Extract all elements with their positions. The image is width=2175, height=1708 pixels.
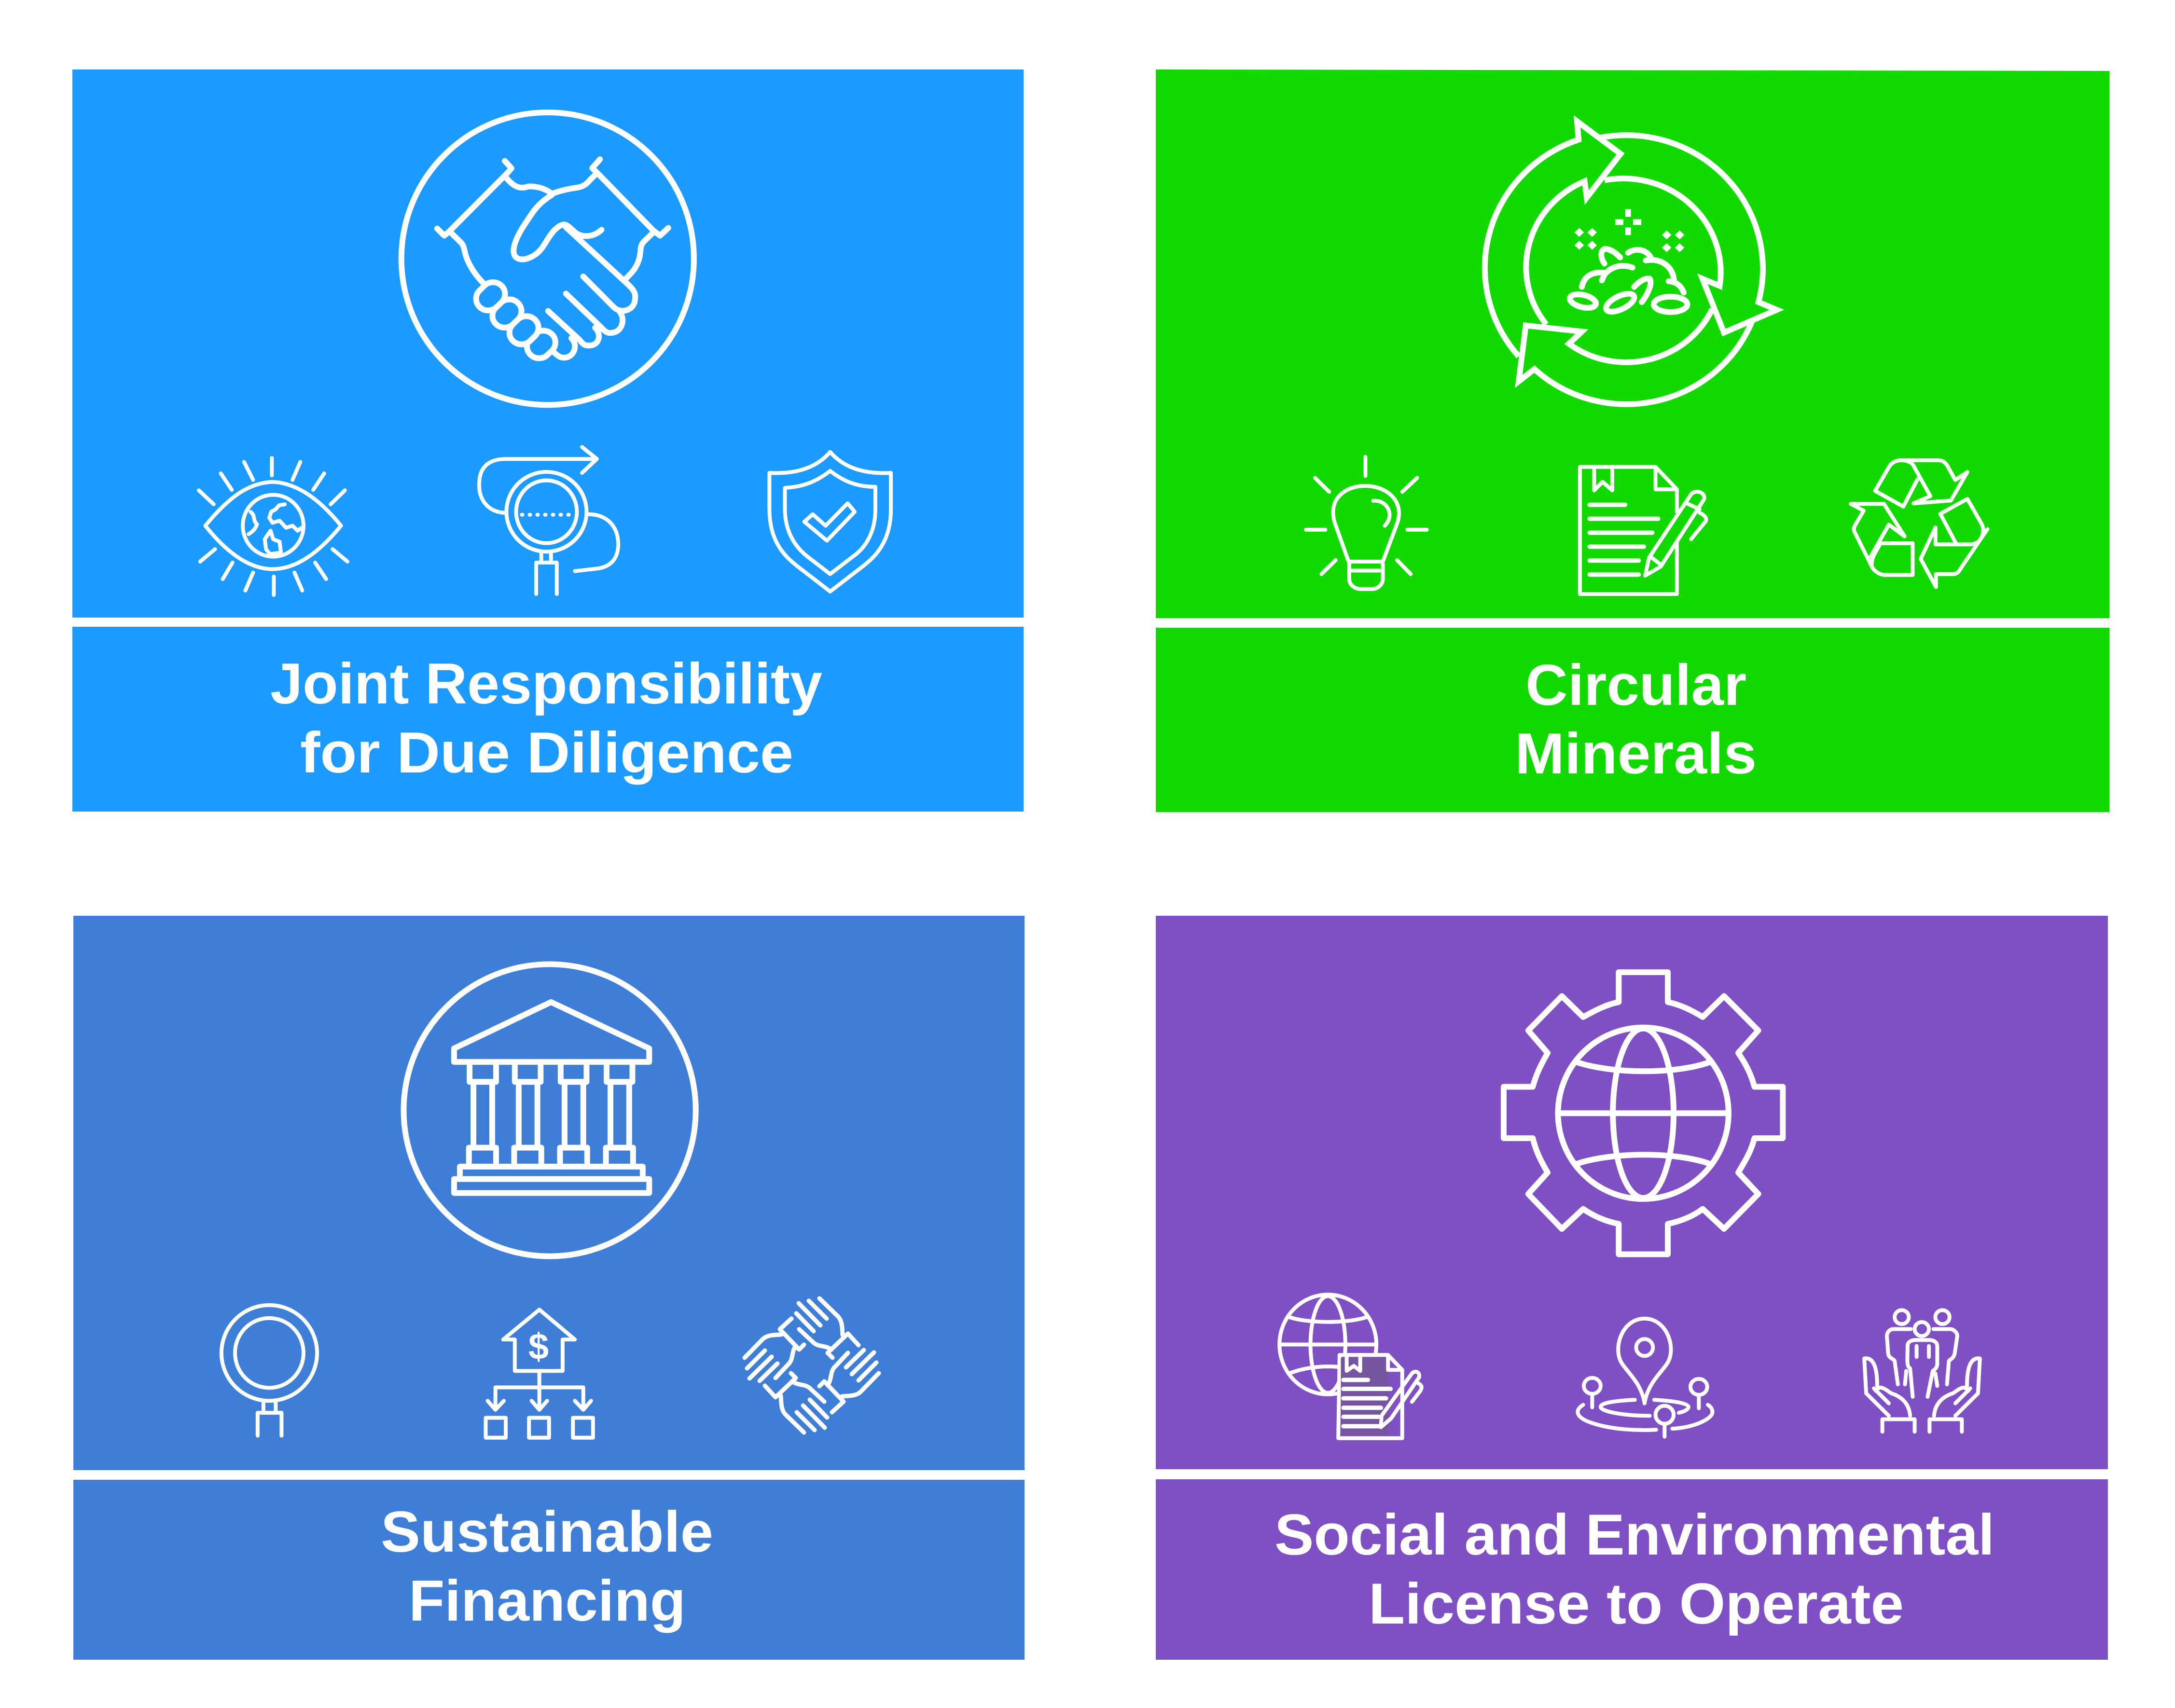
icon: handshake in circle <box>402 112 694 405</box>
icon: house with dollar and allocation tree: $ <box>528 1326 549 1367</box>
icon: circular arrows around minerals <box>1485 122 1777 404</box>
icon: people held in hands <box>1864 1310 1980 1432</box>
panel: Joint Responsibility for Due Diligence <box>72 69 1024 812</box>
heading: Circular Minerals: Minerals <box>1515 721 1757 786</box>
icon: location pins <box>1578 1319 1712 1437</box>
heading: Circular Minerals <box>1515 653 1757 786</box>
caption band: purple <box>1156 1479 2108 1660</box>
panel: Social and Environmental License to Operate <box>1156 916 2108 1660</box>
panel background: green icon area <box>1156 69 2109 618</box>
panel background: steel blue icon area <box>73 916 1025 1470</box>
heading: Social and Environmental License to Operate: Social and Environmental <box>1275 1502 1995 1567</box>
heading: Circular Minerals: Circular <box>1525 653 1746 717</box>
heading: Social and Environmental License to Operate: License to Operate <box>1369 1571 1904 1636</box>
heading: Joint Responsibility for Due Diligence: for Due Diligence <box>300 720 793 785</box>
icon: gear with globe <box>1504 972 1783 1254</box>
icon: recycling arrows <box>1851 460 1987 587</box>
caption band: steel blue <box>73 1480 1025 1660</box>
icon: shield with check <box>769 452 891 592</box>
icon: four linked hands <box>745 1298 879 1433</box>
caption band: blue <box>72 627 1024 812</box>
caption band: green <box>1156 628 2109 812</box>
panel background: blue icon area <box>72 69 1024 618</box>
panel background: purple icon area <box>1156 916 2108 1469</box>
heading: Sustainable Financing: Sustainable <box>381 1500 713 1564</box>
heading: Sustainable Financing <box>381 1500 713 1633</box>
icon: magnifier with process arrow <box>479 447 618 594</box>
icon: eye with globe <box>199 458 347 595</box>
heading: Joint Responsibility for Due Diligence: Joint Responsibility <box>270 651 822 716</box>
icon: magnifying glass <box>222 1305 317 1436</box>
panel: Sustainable Financing <box>73 916 1025 1660</box>
heading: Social and Environmental License to Operate <box>1275 1502 1995 1636</box>
icon: light bulb <box>1306 457 1427 589</box>
heading: Joint Responsibility for Due Diligence <box>270 651 822 785</box>
panel: Circular Minerals <box>1156 69 2109 812</box>
icon: bank building in circle <box>403 964 696 1256</box>
icon: document with pencil <box>1580 467 1706 594</box>
icon: house with dollar and allocation tree <box>486 1309 593 1438</box>
heading: Sustainable Financing: Financing <box>409 1569 686 1633</box>
icon: globe with document <box>1279 1295 1422 1438</box>
